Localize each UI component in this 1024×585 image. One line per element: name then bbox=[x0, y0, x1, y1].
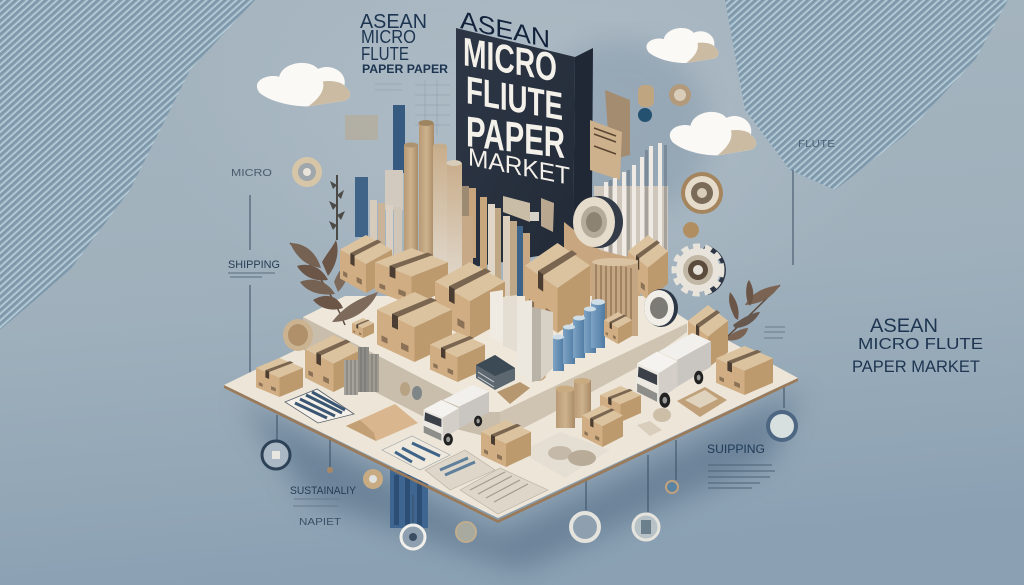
main floor bbox=[224, 320, 798, 523]
ring icon: grey bbox=[571, 513, 599, 541]
heading: small upper left: FLUTE bbox=[361, 44, 409, 64]
slab heading text: FLIUTE bbox=[466, 68, 563, 129]
ring icon: tan tiny bbox=[666, 481, 678, 493]
floor boxes bbox=[600, 386, 641, 422]
box right bbox=[716, 346, 773, 395]
background faint chart panel bbox=[375, 80, 450, 135]
stripe sheet centre bbox=[382, 436, 450, 470]
ring icon: tan small bbox=[327, 467, 333, 473]
label: shipping left bbox=[228, 259, 280, 277]
pinned document beside slab bbox=[590, 90, 630, 180]
small box and pebble bbox=[352, 318, 546, 381]
ring icon: white bbox=[401, 525, 425, 549]
platform shadow bbox=[240, 390, 800, 570]
sketch sheets on floor bbox=[425, 432, 610, 514]
side heading: PAPER MARKET bbox=[852, 357, 980, 376]
clouds bbox=[257, 28, 756, 155]
cardboard rolls bbox=[404, 120, 462, 293]
connector lines bbox=[250, 170, 793, 524]
box bbox=[430, 332, 485, 382]
blue cylinders bbox=[552, 299, 605, 371]
upper shelf bbox=[303, 296, 690, 440]
box bbox=[375, 248, 448, 305]
dark title slab bbox=[456, 28, 593, 270]
heading: small upper left bbox=[360, 11, 448, 76]
label: shipping left: SHIPPING bbox=[228, 259, 280, 271]
box bbox=[435, 262, 505, 340]
white truck right bbox=[636, 333, 711, 408]
tan cylinders bbox=[556, 378, 591, 428]
gear icon bbox=[674, 245, 726, 295]
side heading: MICRO FLUTE bbox=[858, 336, 983, 353]
back tier filler of boxes bbox=[340, 235, 392, 293]
kraft wrapped paper bbox=[346, 404, 418, 441]
corrugated stack bbox=[592, 258, 638, 336]
slab note cards bbox=[503, 196, 554, 232]
slab heading text: MICRO bbox=[463, 29, 557, 91]
hatched texture: top left bbox=[0, 0, 255, 330]
blue columns below platform bbox=[390, 470, 428, 528]
label: flute: FLUTE bbox=[798, 139, 835, 150]
ring icon: document bbox=[633, 514, 659, 540]
slab heading text: ASEAN bbox=[460, 6, 550, 54]
floor box bbox=[582, 405, 623, 447]
heading: small upper left: ASEAN bbox=[360, 11, 427, 33]
leaf: thin left sprig bbox=[329, 175, 345, 240]
leaf: left fern bbox=[290, 240, 378, 325]
box left bbox=[256, 358, 303, 397]
round seal on floor bbox=[283, 319, 313, 351]
small round tan badge bbox=[683, 222, 699, 238]
ring icon: navy right bbox=[766, 410, 798, 442]
disc icon bbox=[644, 289, 678, 327]
box left large bbox=[305, 335, 362, 392]
dark shipping bundle bbox=[476, 355, 530, 404]
heading: small upper left: PAPER PAPER bbox=[362, 62, 448, 76]
upper round icon bbox=[681, 172, 723, 214]
ring icon: navy lower left bbox=[262, 441, 290, 469]
small box by cylinders bbox=[604, 312, 632, 344]
small lock icons bbox=[638, 84, 691, 122]
ring icons on wall bbox=[400, 382, 422, 400]
side heading bbox=[852, 316, 983, 376]
label: micro: MICRO bbox=[231, 168, 272, 179]
small paper tube columns bbox=[345, 105, 405, 257]
label: shipping right bbox=[707, 442, 775, 488]
slab heading text: PAPER bbox=[466, 108, 565, 168]
box bbox=[377, 292, 452, 362]
ascending striped bar chart bbox=[594, 143, 668, 266]
stripe sheet left bbox=[285, 389, 354, 423]
leaf: right bbox=[727, 280, 780, 340]
ring icon: tan bbox=[363, 469, 383, 489]
white truck bbox=[422, 385, 489, 446]
label: sustainability: NAPIET bbox=[299, 517, 341, 528]
heading: small upper left: MICRO bbox=[361, 27, 416, 47]
hatched texture: top right bbox=[725, 0, 1008, 190]
slab heading text: MARKET bbox=[468, 143, 570, 191]
grey corrugated rolls bbox=[344, 347, 379, 395]
white book stack bbox=[490, 290, 553, 382]
label: shipping right: SUIPPING bbox=[707, 442, 765, 456]
tan card behind boxes bbox=[564, 222, 640, 310]
roll with circular seal bbox=[573, 196, 623, 248]
slab heading text bbox=[460, 6, 570, 191]
label: sustainability: SUSTAINALIY bbox=[290, 485, 357, 497]
side heading: ASEAN bbox=[870, 316, 938, 337]
tall boxes behind truck bbox=[688, 305, 728, 368]
small items on floor bbox=[637, 387, 727, 436]
label: sustainability bbox=[290, 485, 357, 528]
ring icon upper left bbox=[292, 157, 322, 187]
shadow around stage bbox=[530, 40, 710, 220]
box foreground bbox=[481, 420, 531, 467]
descending bar chart bbox=[462, 186, 530, 303]
tall box right bbox=[628, 235, 668, 300]
ring icon: faint tan bbox=[456, 522, 476, 542]
tiny caption right bbox=[764, 327, 785, 338]
tall box center bbox=[525, 243, 590, 333]
